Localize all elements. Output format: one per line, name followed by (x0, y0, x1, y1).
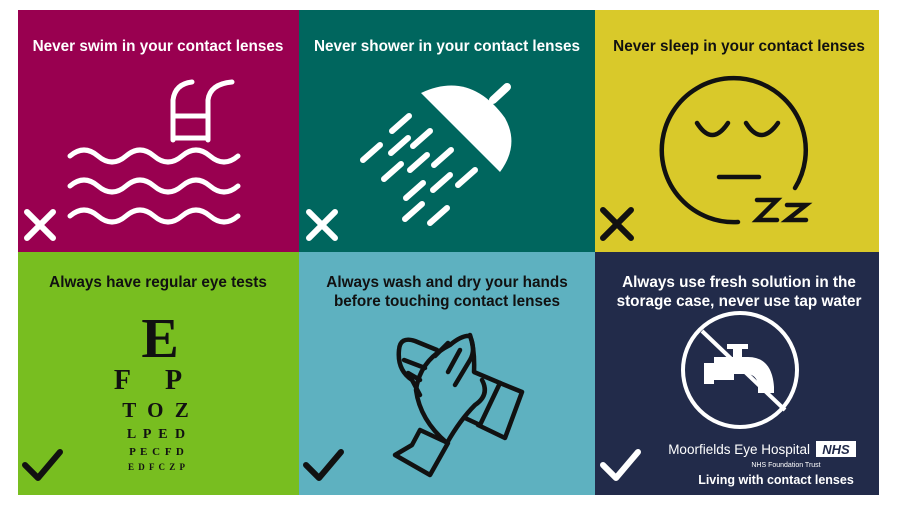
panel: eye tests (18, 252, 299, 495)
panel: fresh solution: storage case, never use tap water (617, 293, 861, 310)
panel: wash hands: before touching contact lenses (334, 293, 560, 310)
icon: pool (70, 82, 238, 222)
icon: tick (603, 452, 638, 478)
icon: eye chart: F P (114, 365, 196, 396)
logo: Moorfields: Living with contact lenses (698, 473, 854, 487)
panel: fresh solution (595, 252, 879, 495)
icon: cross (603, 210, 631, 238)
heading: eye tests: Always have regular eye tests (49, 274, 267, 291)
logo: Moorfields: Moorfields Eye Hospital (668, 442, 810, 457)
panel: swim (18, 10, 299, 252)
heading: shower: Never shower in your contact lenses (314, 38, 580, 55)
icon: tick (306, 452, 341, 478)
heading: fresh solution: Always use fresh solution in the (622, 274, 856, 291)
icon: sleeping face (662, 78, 806, 222)
logo: Moorfields: NHS (822, 442, 850, 457)
icon: shower head (363, 86, 511, 223)
heading: wash hands: Always wash and dry your hands (326, 274, 568, 291)
icon: cross (309, 212, 335, 238)
icon: cross (27, 212, 53, 238)
icon: eye chart: L P E D (127, 427, 187, 442)
icon: hands (395, 335, 522, 475)
icon: tick (25, 452, 60, 478)
icon: no tap (683, 313, 797, 427)
logo: Moorfields: NHS Foundation Trust (751, 462, 821, 469)
panel: shower (299, 10, 595, 252)
icon: eye chart (114, 308, 196, 472)
heading: swim: Never swim in your contact lenses (33, 38, 283, 55)
panel: wash hands (299, 252, 595, 495)
heading: sleep: Never sleep in your contact lenses (613, 38, 865, 55)
logo: Moorfields (668, 441, 856, 487)
icon: eye chart: E (141, 308, 179, 370)
icon: eye chart: T O Z (122, 398, 192, 422)
panel: sleep (595, 10, 879, 252)
icon: eye chart: P E C F D (129, 446, 185, 458)
icon: eye chart: E D F C Z P (128, 462, 186, 472)
